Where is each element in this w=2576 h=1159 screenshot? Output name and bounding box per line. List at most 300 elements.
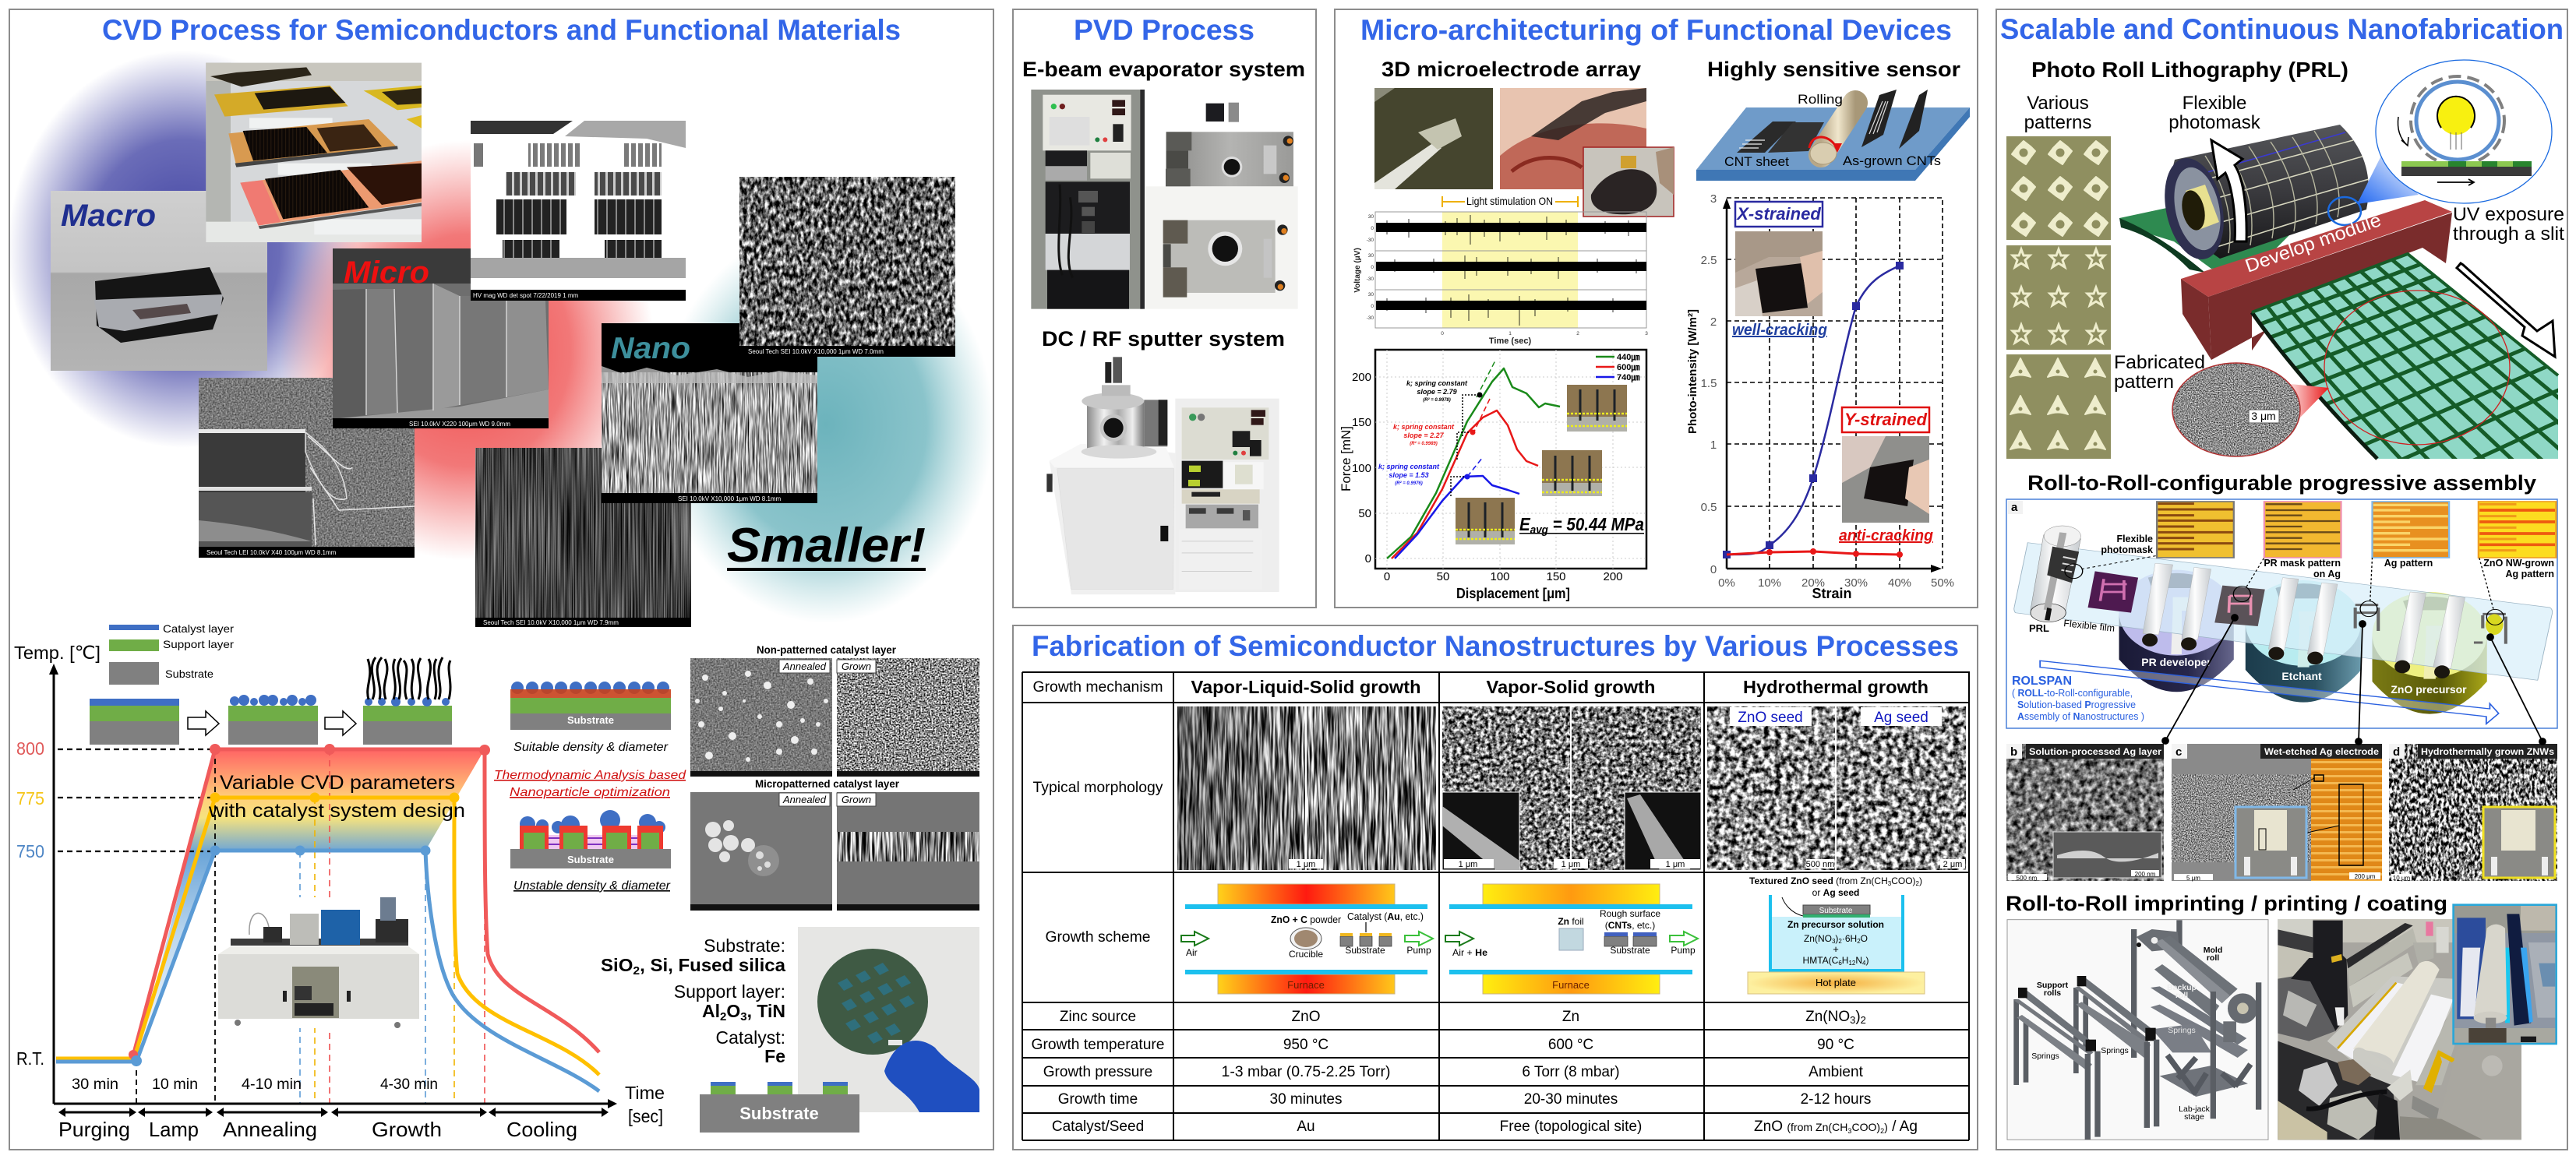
labels: rig parts: Backup [2167,983,2197,992]
table values: Zn(NO [1805,1009,1850,1025]
legend: 600㎛ [1617,363,1639,372]
chart: neural voltage signals: 0 [1371,265,1374,270]
chart: force vs displacement: 150 [1352,416,1371,429]
photo: e-beam evaporator [1031,90,1298,309]
SEM grid: non-patterned catalyst layer: Grown [842,661,871,672]
labels: PRL and film [2029,618,2115,634]
SEM: hydrothermal morphology: Ag seed [1874,710,1928,726]
label: well-cracking: well-cracking [1732,322,1827,339]
column headers: Hydrothermal growth [1743,677,1928,697]
photo: R2R machine [2278,919,2521,1140]
chart: neural voltage signals: Voltage (μV) [1353,248,1362,293]
axis ticks [1701,192,1717,576]
scheme: hydrothermal: N [1855,955,1862,966]
chart: neural voltage signals: 30 [1368,253,1374,259]
curve: 600 um [1392,410,1538,558]
text: materials list: 2 [720,1010,726,1023]
photo: upper-right SEM fibres: Seoul Tech SEI 10.0kV X10,000 1μm WD 7.0mm [748,348,884,355]
caption: thermodynamic analysis: Nanoparticle optimization [510,786,670,799]
photo: sputter system [1046,357,1279,594]
scheme: hydrothermal: H [1842,955,1848,966]
caption: thermodynamic analysis [494,769,686,799]
flexible film [2014,543,2553,680]
diagram: CNT rolling: As-grown CNTs [1843,153,1941,168]
scheme: hydrothermal: 4 [1862,960,1866,967]
photo: macro carbon block [51,191,267,371]
table values: 2 [1880,1127,1884,1135]
photo: upper-right SEM fibres [739,177,955,357]
axis ticks: 0.5 [1701,501,1717,514]
chart: photo-intensity vs strain: 50% [1931,576,1954,590]
curve: 750 C [56,851,599,1091]
chart: force vs displacement: 50 [1358,507,1371,520]
table values: 2 [1861,1014,1866,1026]
thumbnail: flexible photomask [2157,502,2234,558]
caption: suitable density: Suitable density & diameter [513,741,669,754]
process gradient fill [136,749,485,1061]
text: materials list: SiO [601,955,632,975]
labels: thumbnails: on Ag [2313,569,2341,580]
axes [54,671,611,1104]
heading: sensor: Highly sensitive sensor [1707,58,1961,81]
axis label: time: Time [625,1083,665,1103]
circle: SEM zoom target [2324,291,2510,445]
callout: E avg: E [1519,514,1531,534]
labels: rig parts: Mold [2204,946,2222,955]
axis label: temperature: Temp. [℃] [14,643,101,663]
chart: neural voltage signals: 0 [1371,304,1374,309]
annotations: spring constants: slope = 2.27 [1403,432,1445,439]
photo: wafer held in glove [798,927,979,1112]
row headers: Typical morphology [1033,780,1163,796]
scheme: hydrothermal: HMTA(C [1803,955,1838,966]
PRL roller [2031,526,2083,622]
chart: photo-intensity vs strain: 20% [1801,576,1825,590]
scheme: VLS furnace: ZnO + C powder [1271,914,1342,925]
duration labels: 4-10 min [242,1076,302,1093]
photo: well-cracking [1735,231,1823,316]
labels: rig parts: Lab-jack [2179,1104,2211,1114]
text: chart caption: with catalyst system design [208,800,465,822]
SEM grid: non-patterned catalyst layer: Annealed [782,661,827,672]
table values: 950 °C [1283,1037,1329,1053]
stage labels [58,1118,577,1141]
scheme: VS furnace: Zn foil [1558,916,1584,927]
diagram: patterned substrate [700,1082,859,1133]
label: anti-cracking: anti-cracking [1839,527,1933,544]
chart: force vs displacement [1339,350,1646,601]
inset: UV exposure through slit [2376,60,2552,203]
annotations: spring constants: (R² = 0.9989) [1410,441,1438,446]
diagram: suitable catalyst stack [510,682,671,730]
legend: catalyst layers [109,622,234,685]
diagram: develop module [2181,200,2452,360]
callout: E avg: = 50.44 MPa [1548,514,1644,534]
axis ticks: 2 [1710,315,1717,329]
scheme: VS furnace: Rough surface [1600,908,1660,919]
row headers: Zinc source [1060,1009,1136,1025]
annotations: spring constants: slope = 2.79 [1417,388,1457,396]
label: flexible photomask: Flexible [2183,93,2246,114]
temperature labels: 775 [16,788,44,808]
text: chart caption [208,772,465,822]
scheme: hydrothermal: 2 [1916,880,1920,887]
chart: neural voltage signals: 0 [1441,331,1444,336]
SEM: hydrothermal morphology: 2 μm [1943,860,1962,869]
scheme: hydrothermal: COO) [1891,875,1916,886]
diagram: patterned film grid [2250,252,2559,460]
photo: gold chips [206,63,422,242]
table values: 3 [1847,1127,1851,1135]
tank: ZnO precursor [2372,592,2487,714]
text: materials list: , TiN [747,1001,785,1021]
label: annealed [779,660,830,673]
scheme: VS furnace: Pump [1671,945,1696,956]
photo: white-background SEM: HV mag WD det spot 7/22/2019 1 mm [473,292,579,299]
table values: Au [1297,1118,1315,1135]
inset: SEM of fabricated pattern: 3 μm [2251,410,2276,422]
figure d: hydrothermally grown ZNWs: d [2393,745,2400,759]
labels: PRL and film: Flexible film [2063,618,2115,634]
temperature labels: R.T. [16,1048,44,1069]
stage labels: Growth [372,1118,442,1141]
duration labels [72,1076,438,1093]
pattern tiles [2006,136,2111,459]
stage labels: Lamp [149,1118,199,1141]
chart: neural voltage signals: -30 [1367,277,1374,282]
annotation: light stimulation: Light stimulation ON [1466,195,1553,207]
stage arrow heads [58,1108,609,1117]
label: UV exposure [2453,204,2564,245]
legend: catalyst layers: Catalyst layer [163,622,234,635]
diagram: R2R imprinting rig [2007,920,2268,1140]
panel: CVD process [8,9,993,1150]
chart: neural voltage signals: Time (sec) [1489,336,1531,346]
curve: 440 um [1387,368,1560,558]
scheme: hydrothermal: ) [1835,933,1838,944]
label: flexible photomask [2168,93,2261,133]
chart: photo-intensity vs strain: 10% [1758,576,1781,590]
scheme: hydrothermal: ) [1865,955,1868,966]
arrow: roll rotation [2211,140,2246,241]
scheme: hydrothermal: or Ag seed [1812,887,1859,898]
photo: bottom-left SEM: Seoul Tech LEI 10.0kV X40 100μm WD 8.1mm [206,549,337,556]
curve: Y-strained [1727,551,1900,555]
figure b: solution-processed Ag layer: 200 nm [2135,871,2156,878]
legend: 740㎛ [1617,373,1639,382]
chart: force vs displacement: Force [mN] [1339,426,1353,491]
chart: force vs displacement: 100 [1352,462,1371,475]
scheme: hydrothermal: Hot plate [1816,977,1856,988]
diagram: develop module: Develop module [2243,210,2384,277]
text: materials list: Fe [764,1046,785,1066]
table values: 1-3 mbar (0.75-2.25 Torr) [1222,1064,1390,1080]
figure d: hydrothermally grown ZNWs: 10 μm [2393,875,2411,882]
scheme: hydrothermal: 2 [1857,938,1861,945]
scheme: VLS furnace: Furnace [1287,979,1325,991]
table values: / Ag [1892,1118,1918,1135]
diagram: CNT rolling [1696,90,1970,181]
table values: Ambient [1808,1064,1864,1080]
labels: rig parts: stage [2184,1112,2204,1122]
SEM: vapor-liquid-solid morphology: 1 μm [1297,860,1315,869]
scheme: VS furnace: Substrate [1610,945,1650,956]
ROLSPAN text: Solution-based Progressive [2017,699,2136,710]
zoom beam [2357,156,2419,204]
stage arrows [63,1111,604,1114]
tank rollers [2142,563,2465,678]
text: materials list: Substrate: [704,935,785,956]
table values: 20-30 minutes [1524,1091,1618,1108]
scheme: hydrothermal: Zn(NO [1804,933,1832,944]
chart: force vs displacement: 200 [1352,371,1371,384]
title: CVD process: CVD Process for Semiconductors and Functional Materials [102,14,901,46]
chart: neural voltage signals: 0 [1371,226,1374,231]
axis ticks: 1.5 [1701,377,1717,390]
table values: Free (topological site) [1500,1118,1642,1135]
temperature labels [16,738,44,1069]
axis ticks: 150 [1546,570,1566,583]
title: scalable: Scalable and Continuous Nanofabrication [2000,13,2564,45]
duration labels: 10 min [152,1076,198,1093]
figure d: hydrothermally grown ZNWs [2389,744,2557,882]
axis ticks: 1 [1710,439,1717,452]
table values: ) [1884,1121,1888,1133]
panel: fabrication of semiconductor nanostructures [1013,625,1978,1150]
chart: neural voltage signals [1353,212,1648,346]
callout: E avg: avg [1530,523,1548,537]
table values [1222,1009,1918,1135]
ROLSPAN text: ROLSPAN [2012,675,2072,688]
photo: implanted electrode [1500,88,1646,189]
legend: catalyst layers: Support layer [163,638,234,650]
heading: 3D microelectrode: 3D microelectrode array [1382,58,1641,81]
photo: anti-cracking [1842,436,1929,523]
scheme: hydrothermal: Substrate [1819,907,1853,915]
scheme: VS furnace: (CNTs, etc.) [1605,920,1655,931]
label: Y-strained: Y-strained [1844,410,1928,429]
text: materials list: , Si, Fused silica [640,955,785,975]
row headers: Catalyst/Seed [1052,1118,1144,1135]
labels: thumbnails: Ag pattern [2506,569,2554,580]
table values: 3 [1850,1014,1855,1026]
chart: neural voltage signals: 30 [1368,214,1374,220]
inset: SEM of fabricated pattern [2172,363,2300,456]
curve: 775 C [56,798,599,1075]
labels: thumbnails [2101,534,2554,580]
text: materials list: Support layer: [674,981,785,1002]
label: various patterns [2024,93,2091,133]
scheme: hydrothermal: ·6H [1842,933,1857,944]
panel: scalable and continuous nanofabrication [1996,9,2576,1150]
scheme: hydrothermal [1748,875,1925,994]
row headers: Growth mechanism [1033,679,1163,696]
photo: inset mouse [1583,147,1674,217]
axis ticks: 0 [1710,563,1717,576]
label: fabricated pattern: pattern [2114,372,2174,393]
chart: neural voltage signals: 1 [1509,331,1512,336]
figure c: wet-etched Ag electrode: c [2175,745,2182,759]
labels: rig parts: Springs [2101,1046,2129,1055]
scheme: VS furnace: Air + He [1452,947,1487,958]
labels: rig parts: roll [2175,991,2188,1000]
title: micro-architecturing: Micro-architecturing of Functional Devices [1360,14,1952,46]
label: various patterns: Various [2027,93,2089,114]
SEM: vapor-solid morphology: 1 μm [1459,860,1477,869]
caption: thermodynamic analysis: Thermodynamic Analysis based [494,769,686,782]
heading: sputter: DC / RF sputter system [1042,327,1285,351]
thumbnail: PR mask pattern [2264,502,2341,558]
heading: PRL: Photo Roll Lithography (PRL) [2031,58,2348,82]
photo inset: roller under UV [2454,905,2557,1044]
leader lines [2081,555,2493,609]
column headers: Vapor-Solid growth [1487,677,1655,697]
label: annealed [779,793,830,806]
scheme: hydrothermal: Zn precursor solution [1787,919,1884,930]
text: materials list: Al [702,1001,720,1021]
scheme: VLS furnace: Air [1186,947,1198,958]
labels: thumbnails: Ag pattern [2384,558,2433,569]
title: PVD process: PVD Process [1074,14,1254,46]
table values: 600 °C [1548,1037,1593,1053]
connector lines with dots [2162,615,2546,745]
axis label: time [625,1083,665,1126]
diagram: roller and green film [2119,125,2369,273]
diagram: unstable catalyst stack [510,810,671,868]
label: Micro: Micro [344,255,429,290]
stage labels: Cooling [506,1118,577,1141]
chart: temperature profile [16,664,665,1141]
curve: X-strained [1727,266,1900,555]
duration labels: 4-30 min [380,1076,438,1093]
axis label: time: [sec] [628,1106,663,1126]
photo: CVD machine [217,897,422,1028]
labels: PRL and film: PRL [2029,622,2049,634]
scheme: hydrothermal: Textured ZnO seed (from Zn(CH [1749,875,1888,886]
row headers: Growth temperature [1032,1037,1164,1053]
tank: PR developer [2119,570,2234,692]
table values: ) [1855,1009,1861,1025]
photo: bottom dark SEM: Seoul Tech SEI 10.0kV X10,000 1μm WD 7.9mm [483,619,619,626]
annotations: spring constants: k; spring constant [1378,463,1440,470]
legend [1596,353,1639,382]
scheme: VS furnace: Furnace [1552,979,1590,991]
labels: tanks: PR developer [2141,656,2211,668]
label: fabricated pattern [2114,352,2205,393]
axis ticks: 100 [1490,570,1510,583]
chart: neural voltage signals: 2 [1576,331,1579,336]
thumbnail: Ag pattern [2372,502,2449,558]
SEM: hydrothermal morphology [1707,706,1966,870]
SEM grid: non-patterned catalyst layer: Non-patterned catalyst layer [757,643,897,656]
red zoom beam [2283,383,2329,421]
labels: rig parts: Support [2037,981,2069,990]
chart: force vs displacement: 0 [1365,552,1371,565]
label: UV exposure: through a slit [2453,224,2564,245]
chart: photo-intensity vs strain: Photo-intensity [W/m²] [1686,309,1699,434]
table values: 6 Torr (8 mbar) [1522,1064,1620,1080]
column headers [1191,677,1928,697]
scheme: VLS furnace: Catalyst (Au, etc.) [1347,911,1424,922]
chart: neural voltage signals: 30 [1368,292,1374,298]
caption: unstable density: Unstable density & diameter [513,879,671,893]
scheme: hydrothermal: ) [1919,875,1922,886]
annotations: spring constants [1378,379,1468,486]
SEM: vapor-liquid-solid morphology [1177,706,1436,870]
figure d: hydrothermally grown ZNWs: Hydrothermally grown ZNWs [2421,746,2554,757]
table values: ZnO (from Zn(CH [1754,1118,1847,1135]
ROLSPAN process arrow [2040,661,2499,724]
figure b: solution-processed Ag layer: 500 nm [2017,875,2038,882]
scheme: hydrothermal: O [1861,933,1868,944]
text: materials list: O [726,1001,740,1021]
axis ticks: 200 [1603,570,1623,583]
heading: e-beam: E-beam evaporator system [1022,58,1305,81]
scheme: VLS furnace: Crucible [1289,949,1323,960]
labels: thumbnails: ZnO NW-grown [2483,558,2554,569]
scheme: hydrothermal: 6 [1838,960,1842,967]
scheme: VLS furnace: Substrate [1345,945,1385,956]
axis ticks: 50 [1437,570,1449,583]
temperature labels: 750 [16,841,44,861]
SEM: hydrothermal morphology: ZnO seed [1738,710,1803,726]
photo: white-background SEM [471,121,686,301]
chart: neural voltage signals: -30 [1367,238,1374,243]
circle: zoom target [2328,197,2361,225]
photo: microelectrode on tweezers [1374,88,1493,189]
table values: COO) [1851,1121,1880,1133]
text: materials list [601,935,785,1066]
table values: 90 °C [1817,1037,1854,1053]
panel: PVD process [1013,9,1316,608]
chart: photo-intensity vs strain: Strain [1812,586,1852,601]
thumbnail: ZnO NW-grown pattern [2479,502,2556,558]
photo: nano SEM [602,323,817,503]
chart: neural voltage signals: 3 [1645,331,1648,336]
labels: thumbnails: PR mask pattern [2264,558,2341,569]
annotations: spring constants: k; spring constant [1406,379,1468,387]
stage labels: Purging [58,1118,130,1141]
stage labels: Annealing [223,1118,317,1141]
figure c: wet-etched Ag electrode [2172,744,2382,882]
label: flexible photomask: photomask [2168,112,2261,133]
text: materials list: 3 [740,1010,747,1023]
legend: catalyst layers: Substrate [165,668,213,680]
ROLSPAN drawing [2014,502,2556,724]
curve: 800 C [56,749,599,1059]
scheme: hydrothermal: 3 [1888,880,1892,887]
row headers: Growth scheme [1046,929,1150,946]
SEM: vapor-solid morphology [1442,706,1701,870]
arrows: stack progression [188,711,356,735]
background colour blobs [8,51,993,623]
annotations: spring constants: k; spring constant [1393,423,1455,431]
row headers [1032,679,1164,1135]
scheme: hydrothermal: 12 [1848,960,1856,967]
figure c: wet-etched Ag electrode: 200 μm [2355,873,2376,880]
chart: photo-intensity vs strain [1686,192,1954,601]
curve: 740 um [1395,476,1519,558]
text: chart caption: Variable CVD parameters [220,772,455,794]
chart: neural voltage signals: -30 [1367,315,1374,321]
tank: etchant [2246,580,2361,703]
figure b: solution-processed Ag layer: b [2010,745,2017,759]
chart: photo-intensity vs strain: 30% [1844,576,1868,590]
row headers: Growth time [1058,1091,1138,1108]
duration labels: 30 min [72,1076,118,1093]
labels: tanks [2141,656,2467,696]
chart: photo-intensity vs strain: 40% [1888,576,1911,590]
